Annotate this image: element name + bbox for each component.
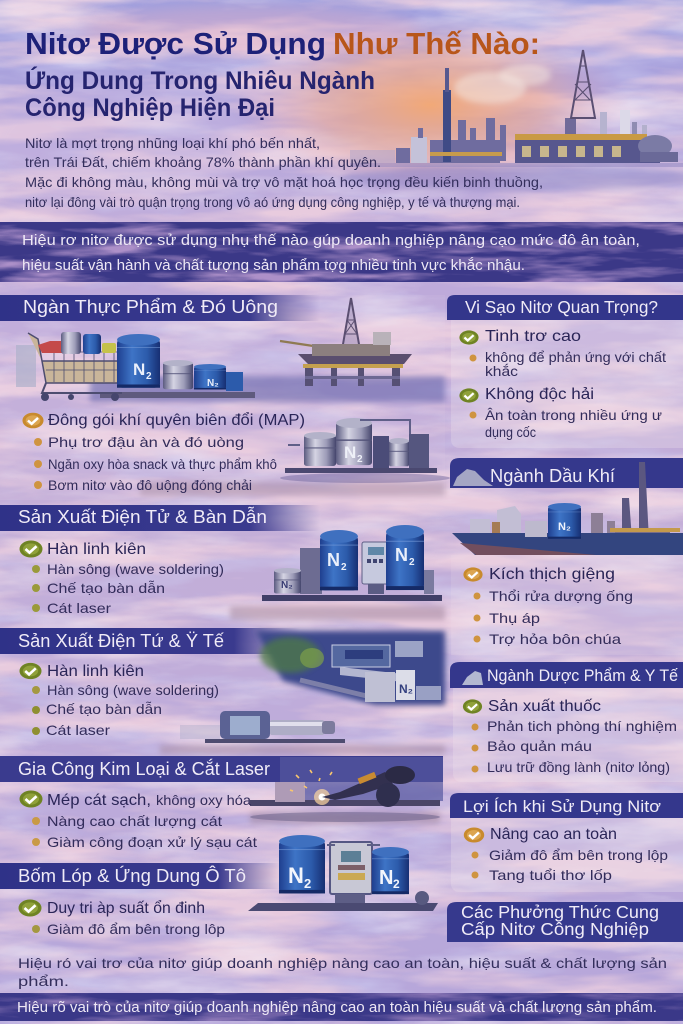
illustration: nitrogen generator with blue tanks: N₂ [281,580,293,591]
illustration: large nitrogen generator: 2 [393,877,400,891]
title: Nitơ Được Sử Dụng [25,26,326,61]
bullet list: Phản tich phòng thí nghiệm [487,718,677,734]
bullet list: Phụ trơ đậu àn và đó uòng [48,434,244,450]
ground strips under the left-hand illustrations [140,482,445,824]
illustration: ship with refinery [452,462,683,555]
illustration: nitrogen process equipment: N [344,443,356,462]
oil and gas heading [450,458,683,488]
pharma panel body [453,680,683,782]
bullet list [472,847,668,883]
illustration: large nitrogen generator: 2 [304,876,311,891]
check item: Sản xuất thuốc [488,698,601,715]
panel: pharma and healthcare [450,662,683,782]
intro text: Nitơ là mợt trọng nhũng loại khí phó bến nhất, [25,135,320,151]
food heading [0,295,320,321]
check item: Duy tri àp suất ổn đinh [47,899,205,917]
panel: food and beverage [0,295,450,500]
bullet list [32,813,257,850]
intro banner [0,222,683,282]
title [25,26,540,61]
food panel background [0,295,445,500]
subtitle: Ứng Dung Trong Nhiêu Ngành [25,65,375,95]
check item: Hàn linh kiên [47,541,146,558]
bullet list [32,682,219,738]
bullet list [472,718,677,775]
bullet list [474,588,633,647]
bullet list: Hàn sông (wave soldering) [47,561,224,577]
panel: benefits of nitrogen [450,793,683,892]
illustration: nitrogen generator with blue tanks: 2 [341,562,347,573]
bullet list: Giàm công đoạn xử lý sạu cát [47,834,257,850]
closing text [18,955,667,989]
benefits heading [450,793,683,818]
bullet list [34,434,277,493]
illustration: nitrogen generator with blue tanks: N [395,545,408,565]
benefits heading: Lợi Ích khi Sử Dụng Nitơ [463,797,661,816]
check item: không oxy hóa [156,792,251,808]
illustration: offshore oil rig [280,298,412,386]
illustration: nitrogen generator with blue tanks: N [327,550,340,570]
bullet list: Nàng cao chất lượng cát [47,813,222,829]
panel: tyre inflation and automotive [0,835,438,937]
benefits panel body [451,810,683,892]
illustration: laser cutter with sparks [250,766,440,822]
panel: why nitrogen matters [447,295,683,448]
non-toxic property [459,386,662,440]
non-toxic property: Không độc hải [485,386,594,403]
bullet list: Cát laser [46,722,110,738]
electronics heading: Sản Xuất Điện Tử & Bàn Dẫn [18,506,267,527]
hero illustration: refinery on the water [340,50,683,191]
bullet list: Bảo quản máu [487,738,592,754]
illustration: horizontal cylinder machine [180,711,345,743]
check item: Kích thịch giệng [489,566,615,583]
metalworking heading [0,756,443,801]
illustration: shopping cart with nitrogen tanks: 2 [146,371,152,382]
panel: nitrogen supply methods: Cấp Nitơ Công Nghiệp [461,919,649,939]
pharma heading [450,662,683,688]
why heading [447,295,683,320]
bullet list: Giàm đô ẩm bên trong lôp [47,921,225,937]
inert property: khắc [485,363,518,379]
subtitle [25,65,375,122]
bullet list: Chế tạo bàn dẫn [46,701,162,717]
electronics and health heading [0,628,300,654]
bullet list: Thổi rửa dượng ống [489,588,633,604]
title: Như Thế Nào: [333,26,540,61]
illustration: nitrogen generator with blue tanks [262,525,442,601]
electronics heading [0,505,320,531]
panel: nitrogen supply methods [447,902,683,942]
automotive heading [0,863,280,889]
panel: electronics and healthcare [0,628,445,743]
check item [20,790,251,809]
footer banner: Hiệu rõ vai trò của nitơ giúp doanh nghiệp nâng cao an toàn hiệu suất và chất lượng sản phẩm. [17,999,657,1016]
check item: Mép cát sạch, [47,792,151,809]
footer banner [0,993,683,1021]
illustration: shopping cart with nitrogen tanks: N₂ [207,378,219,389]
bullet list: Trợ hỏa bôn chúa [489,631,621,647]
bullet list: Cát laser [47,600,111,616]
closing text: Hiệu ró vai trơ của nitơ giúp doanh nghiệp nàng cao an toàn, hiệu suất & chất lượng sản [18,955,667,971]
automotive heading: Bốm Lóp & Ứng Dung Ô Tô [18,865,246,886]
illustration: nitrogen process equipment [280,418,450,483]
intro banner: Hiệu rơ nitơ được sử dụng nhụ thế nào gúp doanh nghiệp nâng cạo mức đô ân toàn, [22,232,640,249]
illustration: large nitrogen generator: N [288,863,304,888]
illustration: large nitrogen generator [248,835,438,911]
bullet list: Hàn sông (wave soldering) [47,682,219,698]
illustration: shopping cart with nitrogen tanks [16,332,255,401]
illustration: nitrogen process equipment: 2 [357,454,363,465]
bullet list: Tang tuổi thơ lốp [489,867,612,883]
bullet list: Thụ áp [489,610,540,626]
metalworking heading: Gia Công Kim Loại & Cắt Laser [18,758,270,779]
bullet list: Chế tạo bàn dẫn [47,580,165,596]
electronics and health heading: Sản Xuất Điện Tứ & Ÿ Tế [18,631,224,651]
illustration: industrial machines with plants: N₂ [399,682,413,696]
non-toxic property: Ân toàn trong nhiều ứng ư [485,407,662,423]
check item: Nâng cao an toàn [490,826,617,843]
subtitle: Công Nghiệp Hiện Đại [25,94,275,122]
panel: nitrogen supply methods: Các Phưởng Thức Cung [461,902,659,922]
inert property: Tinh trơ cao [485,328,581,345]
intro banner: hiệu suất vận hành và chất tượng sản phẩm tợg nhiều tinh vực khắc nhậu. [22,257,525,274]
panel: electronics and semiconductors [0,505,442,616]
intro text: Mặc đi không màu, không mùi và trợ vô mặt hoá học trọng đều kiến binh thuồng, [25,174,543,190]
intro text: nitơ lại đông vài trò quận trọng trong vô aó ứng dụng công nghiệp, y tế và thượng mại. [25,194,520,210]
inert property: không để phản ứng với chất [485,349,666,365]
illustration: large nitrogen generator: N [379,867,393,889]
oil and gas body [451,555,683,655]
inert property [459,328,666,379]
illustration: industrial machines with plants [256,631,445,705]
illustration: sea strip [90,376,445,402]
oil and gas heading: Ngành Dầu Khí [490,466,615,486]
bullet list: Ngăn oxy hòa snack và thực phẩm khô [48,456,277,472]
food heading: Ngàn Thực Phẩm & Đó Uông [23,297,278,317]
why panel background [451,300,683,448]
illustration: nitrogen generator with blue tanks: 2 [409,557,415,568]
bullet list [32,561,224,616]
panel: metalworking and laser cutting [0,756,443,850]
intro text: trên Trái Đất, chiếm khoảng 78% thành phần khí quyên. [25,154,381,170]
intro text [25,135,543,210]
check item: Hàn linh kiên [47,663,144,680]
why heading: Vi Sạo Nitơ Quan Trọng? [465,297,658,317]
pharma heading: Ngành Dược Phẩm & Y Tế [487,667,678,685]
bullet list: Giảm đô ẩm bên trong lộp [489,847,668,863]
closing text: phẩm. [18,973,69,989]
bullet list: Bơm nitơ vào đô uộng đóng chải [48,477,252,493]
illustration: shopping cart with nitrogen tanks: N [133,360,145,379]
non-toxic property: dụng cốc [485,424,536,440]
bullet list: Lưu trữ đồng lành (nitơ lỏng) [487,759,670,775]
check item: Đông gói khí quyên biên đổi (MAP) [48,411,305,429]
panel: oil and gas [450,458,683,655]
illustration: ship with refinery: N₂ [558,521,571,533]
